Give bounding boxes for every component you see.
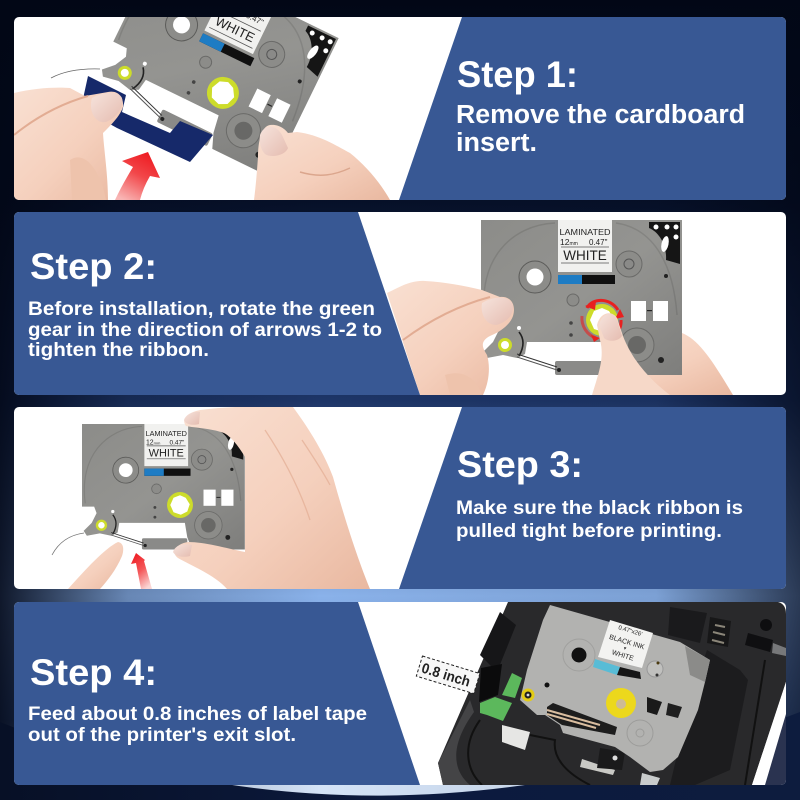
cartridge: step 2: WHITE bbox=[563, 248, 607, 263]
text: step 3: Make sure the black ribbon is bbox=[456, 497, 743, 519]
text: step 1: Remove the cardboard bbox=[456, 101, 745, 129]
green guide bbox=[480, 673, 522, 721]
text: step 2: Before installation, rotate the green bbox=[28, 299, 375, 320]
red arrow: step 1 bbox=[115, 152, 160, 200]
hand: right index finger bbox=[592, 313, 670, 395]
hand: right palm bbox=[648, 333, 733, 395]
cartridge: step 1: WHITE bbox=[213, 13, 257, 45]
blue heading area: step 4 bbox=[14, 602, 420, 785]
panel: step 3 bbox=[14, 406, 786, 589]
rotation arrows: step 2 bbox=[582, 300, 624, 342]
blue heading area: step 3 bbox=[399, 407, 786, 589]
cartridge: step 3 bbox=[82, 424, 245, 550]
cartridge: step 4: 0.47"x26' bbox=[617, 625, 643, 638]
text: step 2: tighten the ribbon. bbox=[28, 340, 209, 361]
cartridge: step 3: WHITE bbox=[149, 447, 184, 459]
heading: step 2: Step 2: bbox=[30, 246, 157, 287]
hand: left bbox=[14, 88, 123, 200]
tape: 0.8 inch: 0.8 inch bbox=[420, 661, 472, 691]
text: step 2: gear in the direction of arrows 1-2 to bbox=[28, 320, 382, 341]
cartridge: step 3: LAMINATED bbox=[146, 431, 187, 438]
tape strand: step 3 bbox=[52, 533, 84, 555]
hand: step 3 bbox=[173, 406, 370, 589]
cartridge: step 1 bbox=[102, 17, 339, 171]
cartridge: step 4 bbox=[520, 605, 710, 772]
panel: step 4 bbox=[14, 602, 786, 785]
heading: step 4: Step 4: bbox=[30, 652, 157, 693]
cartridge: step 4: BLACK INK bbox=[608, 634, 646, 651]
hand: left bbox=[387, 281, 514, 395]
panel: step 2 bbox=[14, 212, 786, 395]
blue heading area: step 2 bbox=[14, 212, 420, 395]
cardboard insert bbox=[81, 76, 213, 162]
text: step 4: Feed about 0.8 inches of label tape bbox=[28, 704, 367, 725]
cartridge: step 2: 12mm bbox=[560, 237, 578, 247]
hand: right bbox=[254, 125, 390, 200]
cartridge: step 4: WHITE bbox=[611, 649, 635, 663]
heading: step 1: Step 1: bbox=[457, 54, 578, 95]
cartridge: step 2: 0.47" bbox=[589, 238, 608, 247]
panel: step 1 bbox=[14, 0, 786, 200]
red arrow: step 3 bbox=[131, 553, 152, 589]
finger: step 3 bbox=[68, 542, 123, 589]
cartridge: step 1: 12mm bbox=[222, 0, 246, 18]
tape strand: step 1 bbox=[51, 69, 100, 78]
cartridge: step 3: 12mm bbox=[146, 439, 161, 446]
heading: step 3: Step 3: bbox=[457, 444, 583, 485]
cartridge: step 1: 0.47" bbox=[245, 11, 265, 27]
cartridge: step 2: LAMINATED bbox=[560, 227, 610, 237]
text: step 1: insert. bbox=[456, 129, 537, 157]
cartridge: step 4: ▾ bbox=[623, 646, 627, 652]
blue heading area: step 1 bbox=[399, 17, 786, 200]
printer bbox=[438, 602, 786, 785]
cartridge: step 3: 0.47" bbox=[169, 439, 185, 446]
text: step 4: out of the printer's exit slot. bbox=[28, 725, 296, 746]
cartridge: step 2 bbox=[481, 220, 682, 375]
text: step 3: pulled tight before printing. bbox=[456, 520, 722, 542]
